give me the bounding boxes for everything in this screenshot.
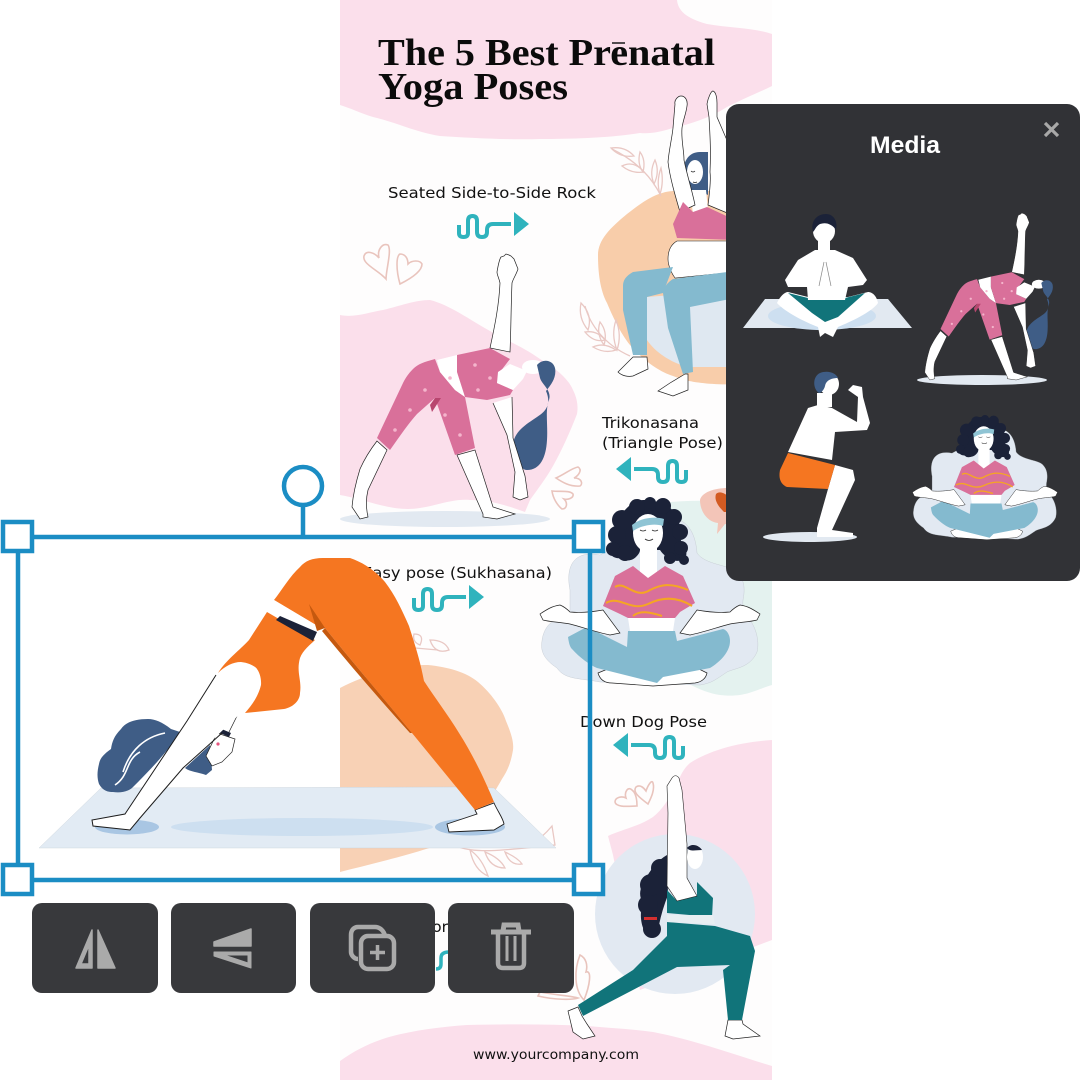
illustration: selected down dog woman <box>39 558 556 848</box>
button: flip vertical <box>171 903 296 993</box>
mint blob behind easy pose <box>670 500 772 696</box>
arrow: trikonasana <box>616 457 686 482</box>
label: seated side-to-side rock: Seated Side-to-Side Rock <box>388 184 596 202</box>
icon: trash can <box>491 925 531 968</box>
button: duplicate <box>310 903 435 993</box>
warrior background circle <box>595 834 755 994</box>
illustration: warrior pose woman <box>568 776 760 1039</box>
orange top <box>218 612 315 713</box>
exercise ball <box>647 296 726 367</box>
label: trikonasana <box>601 414 723 452</box>
hearts under delete button <box>538 955 590 1000</box>
label: warrior pose (mostly hidden behind buttons): Warrior <box>392 918 449 936</box>
leg fold shadows <box>309 604 412 733</box>
neck and head <box>218 708 241 734</box>
waistband <box>268 600 321 640</box>
label: easy pose: Easy pose (Sukhasana) <box>362 564 552 582</box>
arrow: warrior (mostly hidden behind buttons) <box>436 952 449 969</box>
icon: close <box>1045 123 1058 136</box>
footer url: www.yourcompany.com <box>473 1047 639 1063</box>
title: Yoga Poses <box>378 66 568 108</box>
decorative leaves near seated pose <box>580 148 662 356</box>
icon: flip horizontal <box>76 930 115 968</box>
button: delete <box>448 903 574 993</box>
pink blob behind triangle pose <box>340 300 578 512</box>
illustration: seated side-to-side rock woman <box>618 91 735 396</box>
icon: duplicate <box>351 927 394 969</box>
corner handles <box>3 522 603 894</box>
triangle pose mat <box>340 511 550 527</box>
label: trikonasana: Trikonasana <box>601 414 699 432</box>
label: down dog pose: Down Dog Pose <box>580 713 707 731</box>
peach blob behind down dog <box>340 665 513 872</box>
illustration: easy pose woman <box>540 497 760 686</box>
hearts near down dog arrow <box>615 782 654 806</box>
thumbnail: triangle pose <box>917 213 1053 385</box>
icon: flip vertical <box>214 929 251 968</box>
hair <box>98 719 183 792</box>
header pink blob <box>340 0 772 139</box>
title: The 5 Best Prenatal <box>378 32 715 74</box>
hearts bottom-right of triangle pose <box>552 467 582 509</box>
mat shadows <box>95 818 505 836</box>
arrow: seated <box>459 212 529 237</box>
thumbnail: chair squat man <box>763 372 870 542</box>
orange leggings <box>274 558 494 810</box>
bottom pink blob <box>340 1024 772 1080</box>
arrow: down dog <box>613 733 683 758</box>
thumbnail: easy pose <box>912 415 1058 540</box>
hearts top-left <box>364 245 422 284</box>
seated pose peach blob <box>598 191 726 384</box>
title <box>378 32 715 108</box>
foot <box>447 803 504 832</box>
leaf branch near down dog label <box>414 634 449 651</box>
heading: media: Media <box>870 132 941 159</box>
rotation handle <box>284 467 322 537</box>
selection box <box>3 467 603 894</box>
speech bubble with heart <box>700 488 726 534</box>
panel: poster background <box>340 0 772 1080</box>
leaf branch under down dog mat <box>459 826 555 876</box>
illustration: triangle pose woman <box>352 254 555 519</box>
label: trikonasana: (Triangle Pose) <box>602 434 723 452</box>
arrow: easy pose <box>414 585 484 610</box>
panel: media <box>726 104 1080 581</box>
button: flip horizontal <box>32 903 158 993</box>
arm <box>92 662 261 830</box>
thumbnail: meditating man <box>743 214 912 337</box>
pink blob behind warrior pose <box>608 740 772 990</box>
yoga mat <box>39 787 556 848</box>
